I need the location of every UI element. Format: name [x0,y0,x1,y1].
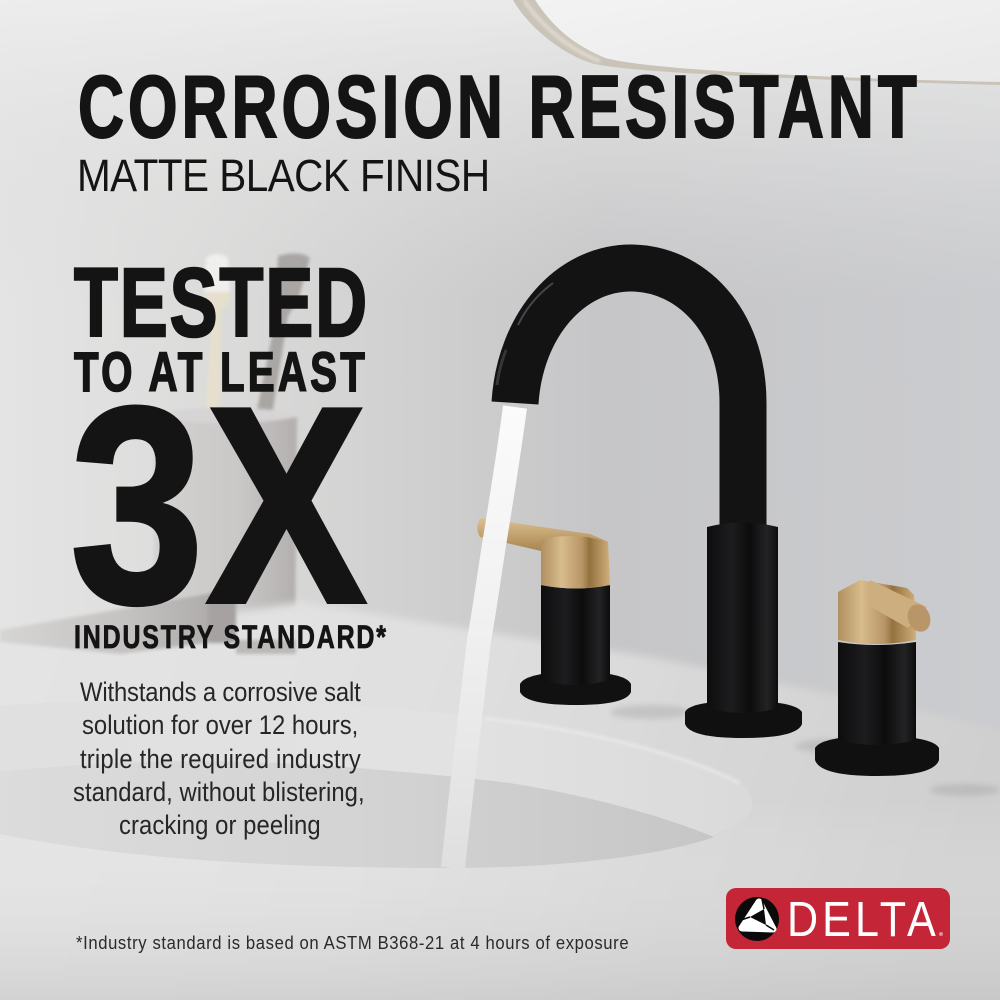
sink basin [0,699,752,868]
black body [838,642,916,745]
base [520,672,631,705]
body copy: cracking or peeling [119,811,321,840]
countertop [0,602,1000,1000]
body copy [73,678,365,840]
body copy: Withstands a corrosive salt [80,678,361,707]
subheading: MATTE BLACK FINISH [77,151,490,202]
body copy: solution for over 12 hours, [82,711,358,740]
footnote: *Industry standard is based on ASTM B368-21 at 4 hours of exposure [76,932,629,953]
Delta logo badge [726,888,950,949]
claim: to at least: TO AT LEAST [74,342,365,404]
lever [477,518,608,551]
gold cap [541,536,610,588]
toothpaste tube [0,593,296,654]
arc [515,268,743,525]
mirror with brushed edge [513,0,1000,85]
rim [0,699,752,868]
body copy: standard, without blistering, [73,778,365,807]
gold cap [838,580,916,644]
base [685,701,802,738]
toothbrush: gray [256,253,310,415]
left handle [477,518,631,705]
base [815,736,939,776]
shadows under faucet [610,705,1000,796]
wordmark: DELTA [787,891,936,947]
bowl [0,761,714,868]
black body [541,585,610,685]
claim: tested: TESTED [74,250,367,358]
registered mark [939,932,943,936]
claim: industry standard: INDUSTRY STANDARD* [74,620,387,656]
lever [869,580,927,628]
icon: Delta triangle emblem [735,897,779,941]
water stream [453,407,515,868]
riser [707,522,778,713]
cup [154,408,298,655]
claim: 3X: 3X [70,350,368,662]
toothbrush: cream [204,254,230,415]
body copy: triple the required industry [80,745,361,774]
heading: CORROSION RESISTANT [78,58,917,157]
toothbrush cup and toothbrushes, blurred [154,253,310,655]
center spout [497,268,802,738]
right handle [815,580,939,776]
